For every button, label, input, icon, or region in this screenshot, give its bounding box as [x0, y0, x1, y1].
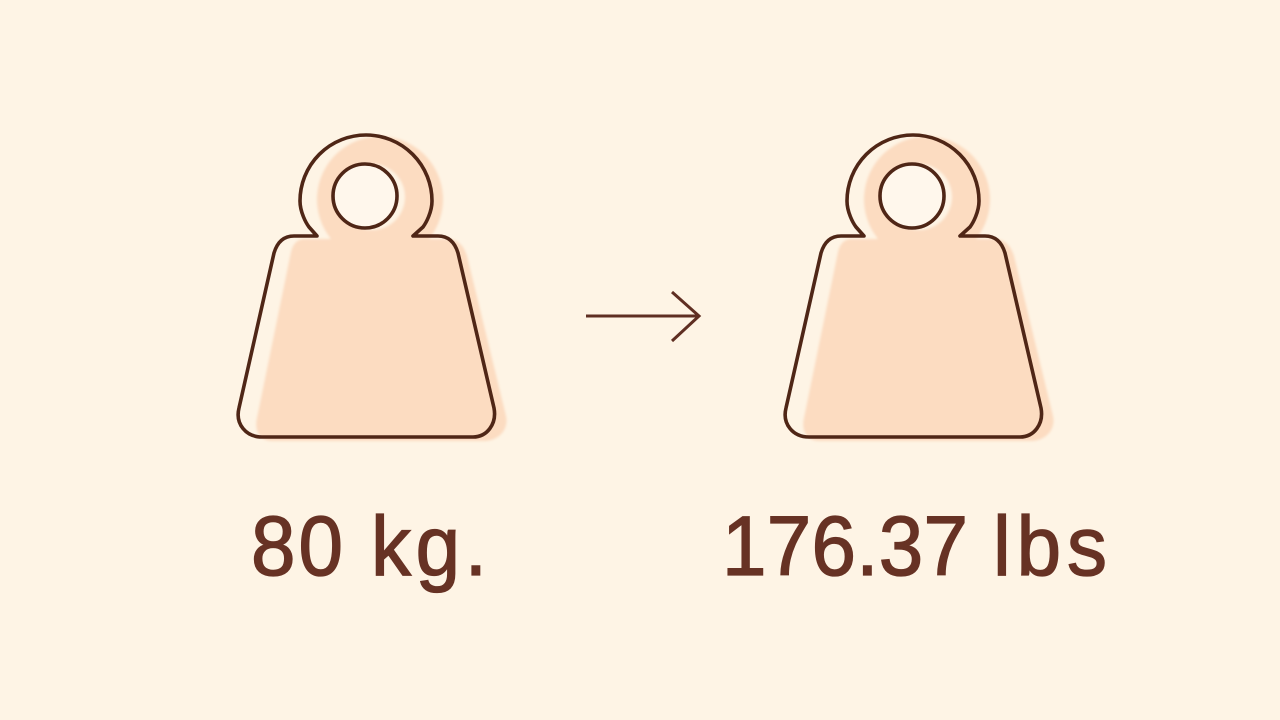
label: 176.37 lbs: 176.37 [722, 500, 968, 593]
label: 80 kg.: kg. [371, 500, 487, 593]
label: 80 kg.: 80 [251, 500, 343, 593]
icon: weight 176.37 lbs [785, 135, 1053, 441]
icon: weight 80 kg [238, 135, 506, 441]
label: 176.37 lbs [722, 500, 1107, 593]
label: 176.37 lbs: lbs [993, 500, 1107, 593]
arrow [586, 292, 699, 341]
label: 80 kg. [251, 500, 487, 593]
